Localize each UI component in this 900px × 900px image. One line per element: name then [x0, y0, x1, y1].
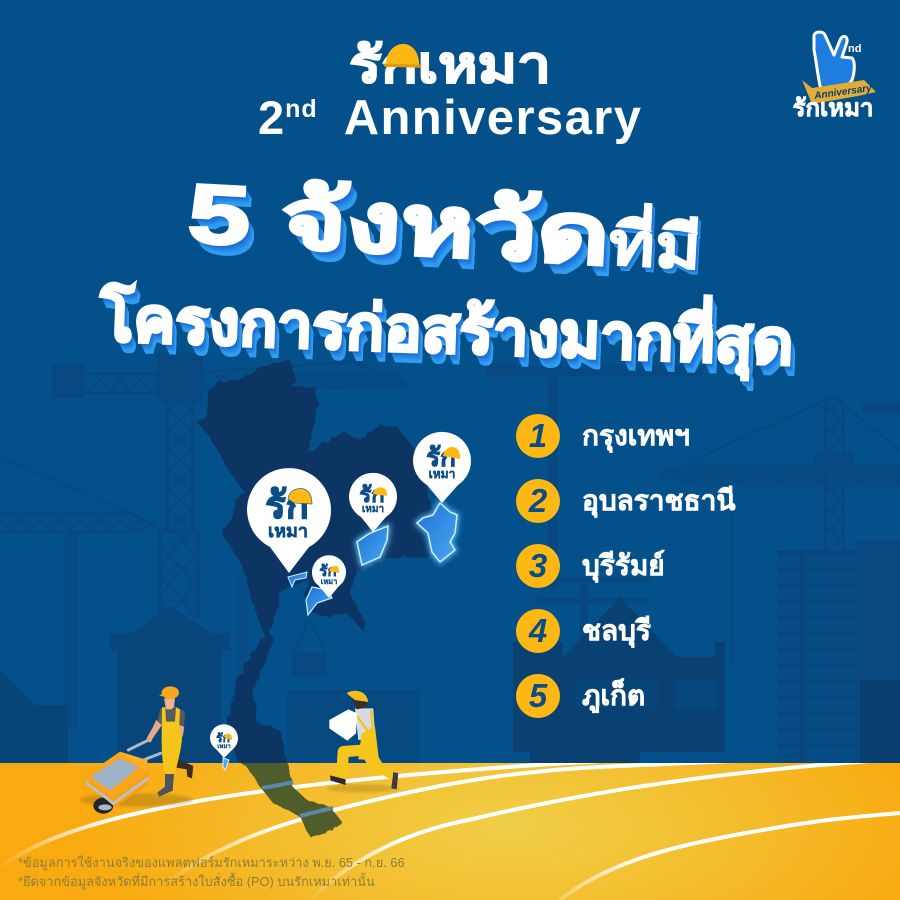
map pin: Phuket [210, 724, 238, 758]
rank 3 [516, 544, 665, 588]
hand icon: nd [848, 43, 861, 55]
ranking list [516, 414, 736, 718]
rank 3: บุรีรัมย์ [582, 550, 665, 581]
left buildings silhouette [0, 606, 420, 763]
rank 5: 5 [529, 677, 547, 714]
footnote: *ยึดจากข้อมูลจังหวัดที่มีการสร้างใบสั่งซื้อ (PO) บนรักเหมาเท่านั้น [18, 874, 375, 889]
rank 1 [516, 414, 690, 458]
right crane and tower silhouette [653, 397, 900, 763]
left crane silhouette [0, 353, 407, 728]
map pin: Ubon Ratchathani [413, 432, 471, 503]
centre crane and building silhouette [487, 348, 734, 763]
map of Thailand [198, 360, 457, 837]
rank 4 [516, 609, 652, 653]
rank 2: 2 [529, 482, 547, 519]
map pin: Chonburi: เหมา [321, 577, 337, 586]
map pin: Phuket: เหมา [217, 743, 231, 750]
top-right anniversary logo [792, 30, 876, 122]
ribbon: Anniversary [813, 83, 873, 102]
rank 1: 1 [529, 417, 547, 454]
province highlight: Ubon Ratchathani [417, 503, 457, 562]
rank 2: อุบลราชธานี [582, 485, 735, 516]
rank 5: ภูเก็ต [582, 680, 645, 711]
map pin: Bangkok: รัก [265, 485, 309, 527]
map pin: Ubon Ratchathani: เหมา [429, 467, 455, 481]
headline line 1: 5 จังหวัด [186, 166, 612, 282]
logo wordmark: รักเหมา [793, 95, 873, 122]
anniversary subtitle: 2nd Anniversary [258, 91, 642, 145]
rank 3: 3 [529, 547, 547, 584]
headline line 1: ที่มี [608, 210, 704, 282]
ground with running track [0, 760, 900, 900]
map pin: Chonburi [312, 555, 346, 598]
worker with wheelbarrow [80, 686, 193, 814]
brand title: รักเหมา [349, 37, 551, 93]
map pin: Phuket: รัก [216, 731, 230, 745]
rank 4: ชลบุรี [582, 615, 651, 646]
worker carrying box [327, 691, 400, 792]
map pin: Ubon Ratchathani: รัก [426, 442, 456, 472]
province highlight: Bangkok [288, 572, 307, 587]
province highlight: Phuket [223, 758, 229, 770]
province highlight: Buriram [357, 526, 388, 565]
footnote [18, 855, 405, 890]
rank 1: กรุงเทพฯ [582, 420, 690, 451]
map pin: Buriram [349, 473, 397, 532]
map pin: Bangkok [247, 468, 331, 573]
rank 2 [516, 479, 736, 523]
icon: helmet in title [382, 44, 422, 68]
rank 5 [516, 674, 645, 718]
map pin: Bangkok: เหมา [268, 521, 308, 541]
province highlight: Chonburi [306, 587, 332, 615]
footnote: *ข้อมูลการใช้งานจริงของแพลตฟอร์มรักเหมาระหว่าง พ.ย. 65 - ก.ย. 66 [18, 855, 405, 870]
map pin: Chonburi: รัก [319, 563, 337, 580]
rank 4: 4 [529, 612, 547, 649]
background scene: construction silhouettes, ground and map [0, 353, 900, 900]
map pin: Buriram: รัก [359, 482, 385, 507]
map pin: Buriram: เหมา [362, 504, 384, 515]
headline line 2: โครงการก่อสร้างมากที่สุด [99, 284, 795, 378]
